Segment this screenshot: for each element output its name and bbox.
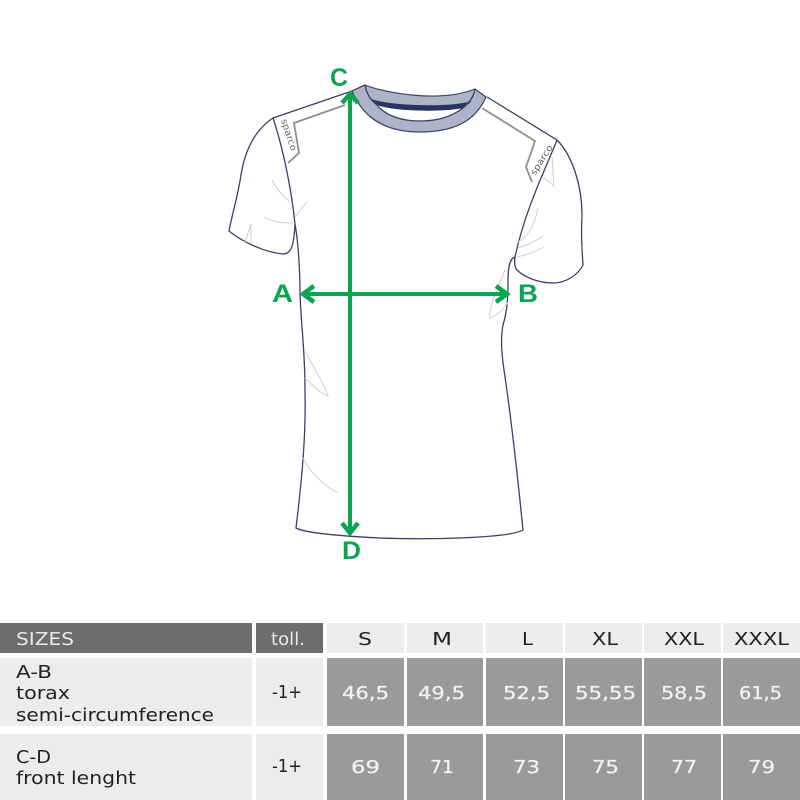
header: M: M [432, 629, 452, 650]
row label: A-B: torax [16, 683, 70, 704]
value: XXL A-B: 58,5 [661, 683, 707, 704]
header: L [486, 623, 563, 653]
header: tolerance [256, 623, 323, 653]
sparco logo left: sparco [278, 118, 298, 153]
fabric folds [245, 157, 554, 493]
value: L A-B: 52,5 [503, 683, 550, 704]
header: XL: XL [592, 629, 618, 650]
row label: A-B [0, 658, 252, 726]
value: XXXL A-B [723, 658, 800, 726]
value: S A-B: 46,5 [342, 683, 389, 704]
header: sizes [0, 623, 252, 653]
header: XXL [644, 623, 721, 653]
shoulder panel right [482, 108, 535, 182]
value: M C-D [407, 734, 483, 800]
value: XXL C-D: 77 [671, 757, 697, 778]
row tolerance: A-B: -1+ [272, 682, 302, 703]
value: XL C-D: 75 [592, 757, 619, 778]
header: sizes: SIZES [16, 629, 74, 650]
header: XXXL [723, 623, 800, 653]
row label: A-B: A-B [16, 662, 52, 683]
row label: C-D: C-D [16, 747, 51, 768]
value: S C-D: 69 [351, 757, 380, 778]
measure arrow A-B [303, 286, 507, 302]
shoulder panel left [288, 105, 345, 163]
value: M A-B: 49,5 [418, 683, 465, 704]
value: XXL A-B [644, 658, 721, 726]
value: L A-B [486, 658, 563, 726]
row label: C-D [0, 734, 252, 800]
label C: C [330, 64, 348, 92]
label B: B [518, 280, 538, 308]
value: L C-D [486, 734, 563, 800]
value: XXXL C-D [723, 734, 800, 800]
header: M [407, 623, 483, 653]
header: XL [565, 623, 642, 653]
value: XXXL A-B: 61,5 [739, 683, 782, 704]
value: S C-D [327, 734, 404, 800]
value: M C-D: 71 [430, 757, 454, 778]
row label: C-D: front lenght [16, 768, 136, 789]
value: XL C-D [565, 734, 642, 800]
header: XXXL: XXXL [734, 629, 789, 650]
value: L C-D: 73 [513, 757, 540, 778]
label A: A [272, 280, 293, 308]
value: M A-B [407, 658, 483, 726]
measure arrow C-D [342, 94, 358, 533]
value: XL A-B [565, 658, 642, 726]
label D: D [342, 537, 361, 565]
t-shirt line drawing [229, 85, 583, 539]
row label: A-B: semi-circumference [16, 705, 214, 726]
row tolerance: C-D [256, 734, 323, 800]
header: S [327, 623, 404, 653]
value: XXXL C-D: 79 [748, 757, 775, 778]
value: XXL C-D [644, 734, 721, 800]
value: S A-B [327, 658, 404, 726]
value: XL A-B: 55,55 [575, 683, 636, 704]
collar [352, 85, 486, 132]
size table [0, 623, 800, 800]
sparco logo right: sparco [529, 143, 556, 178]
header: XXL: XXL [664, 629, 704, 650]
shirt outline [229, 85, 583, 539]
row tolerance: A-B [256, 658, 323, 726]
row tolerance: C-D: -1+ [272, 756, 302, 777]
header: tolerance: toll. [271, 629, 305, 650]
header: L: L [522, 629, 533, 650]
header: S: S [358, 629, 372, 650]
